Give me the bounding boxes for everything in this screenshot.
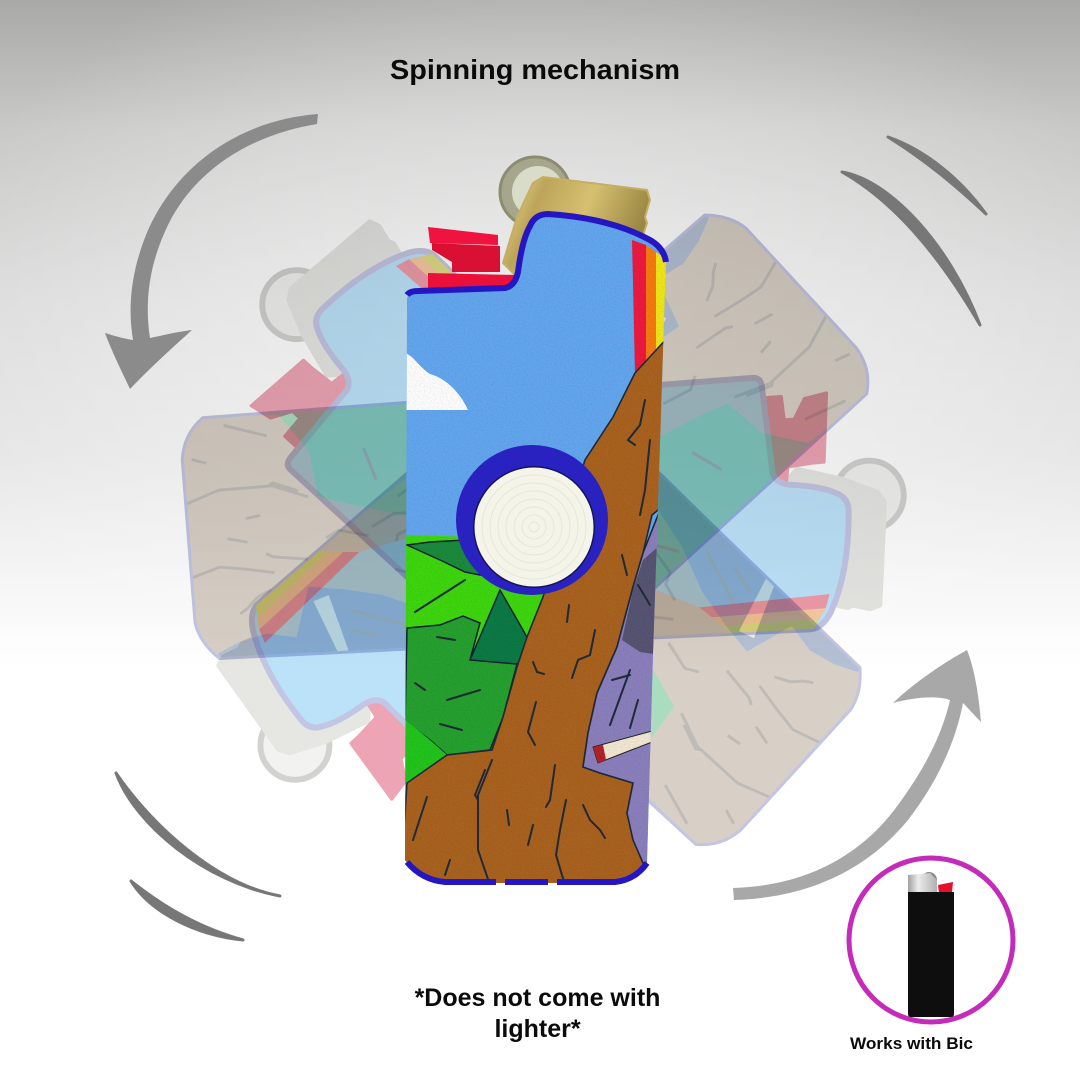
disclaimer note: *Does not come with [415,984,660,1012]
disclaimer note: lighter* [494,1015,581,1043]
red lever [428,227,517,290]
bic lighter [908,872,954,1017]
ghost lighter: rotated upper left [182,183,894,866]
compatibility badge [849,858,1013,1053]
gold hood [503,177,650,280]
purple circle [849,858,1013,1022]
arrow: bottom right clockwise [733,650,981,900]
swish: bottom left outer [116,773,280,896]
main lighter [400,157,670,890]
cloud [405,353,468,410]
badge caption: Works with Bic [850,1034,973,1053]
spinner ring and disc [456,445,608,595]
ghost lighter: rotated lower left [179,181,890,866]
lighter case [400,210,670,890]
joint [593,731,652,763]
ghost lighter: rotated right [173,360,914,682]
arrow: top left counter-clockwise [105,114,318,389]
swish: top right inner [842,172,980,325]
striker wheel [500,157,570,227]
swish: top right outer [888,137,986,214]
swish: bottom left inner [131,881,243,940]
case rim [407,214,666,882]
title: Spinning mechanism [390,54,680,85]
